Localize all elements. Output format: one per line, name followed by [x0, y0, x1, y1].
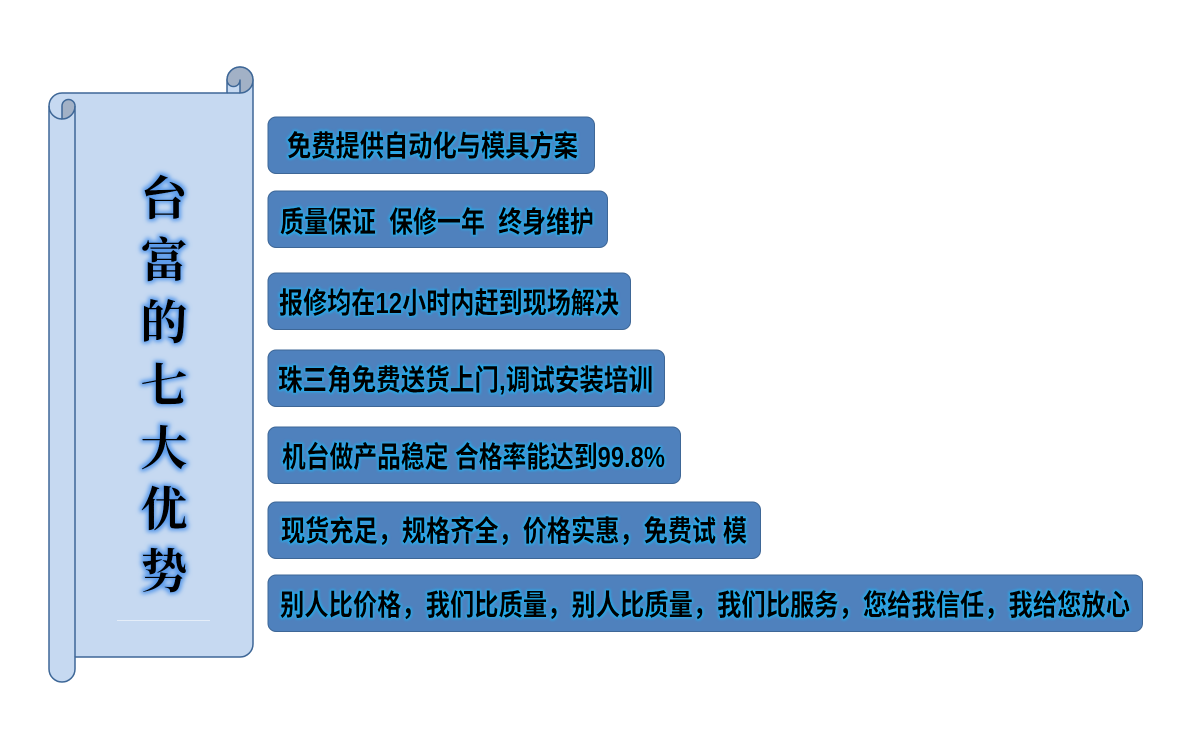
bar 4	[268, 350, 664, 406]
scroll left curl	[62, 100, 75, 119]
bar 6	[268, 502, 760, 558]
scroll main sheet	[49, 67, 253, 682]
scroll top fold line	[227, 92, 240, 94]
bar 4: 珠三角免费送货上门,调试安装培训	[278, 364, 653, 397]
vertical title: 势	[140, 547, 188, 599]
bar 1: 免费提供自动化与模具方案	[287, 130, 578, 163]
vertical title	[140, 174, 190, 599]
vertical title: 的	[140, 298, 188, 350]
bar 2	[268, 191, 608, 248]
vertical title: 大	[140, 424, 188, 476]
vertical title: 优	[140, 485, 188, 537]
vertical title: 七	[140, 361, 188, 413]
bar 6: 现货充足，规格齐全，价格实惠，免费试 模	[281, 515, 747, 548]
bar 5: 机台做产品稳定 合格率能达到99.8%	[282, 440, 665, 474]
bar 3	[268, 273, 630, 330]
bar 5	[268, 427, 680, 484]
bar 1	[268, 117, 594, 174]
bar 2: 质量保证 保修一年 终身维护	[280, 206, 594, 239]
panel: vertical scroll	[49, 67, 253, 682]
scroll top curl	[227, 67, 253, 93]
bar 7	[268, 575, 1142, 632]
bar 3: 报修均在12小时内赶到现场解决	[279, 287, 619, 320]
vertical title: 台	[140, 174, 190, 226]
vertical title: 富	[140, 236, 188, 288]
scroll left roll edge	[49, 106, 75, 657]
scroll thin line	[117, 620, 210, 622]
